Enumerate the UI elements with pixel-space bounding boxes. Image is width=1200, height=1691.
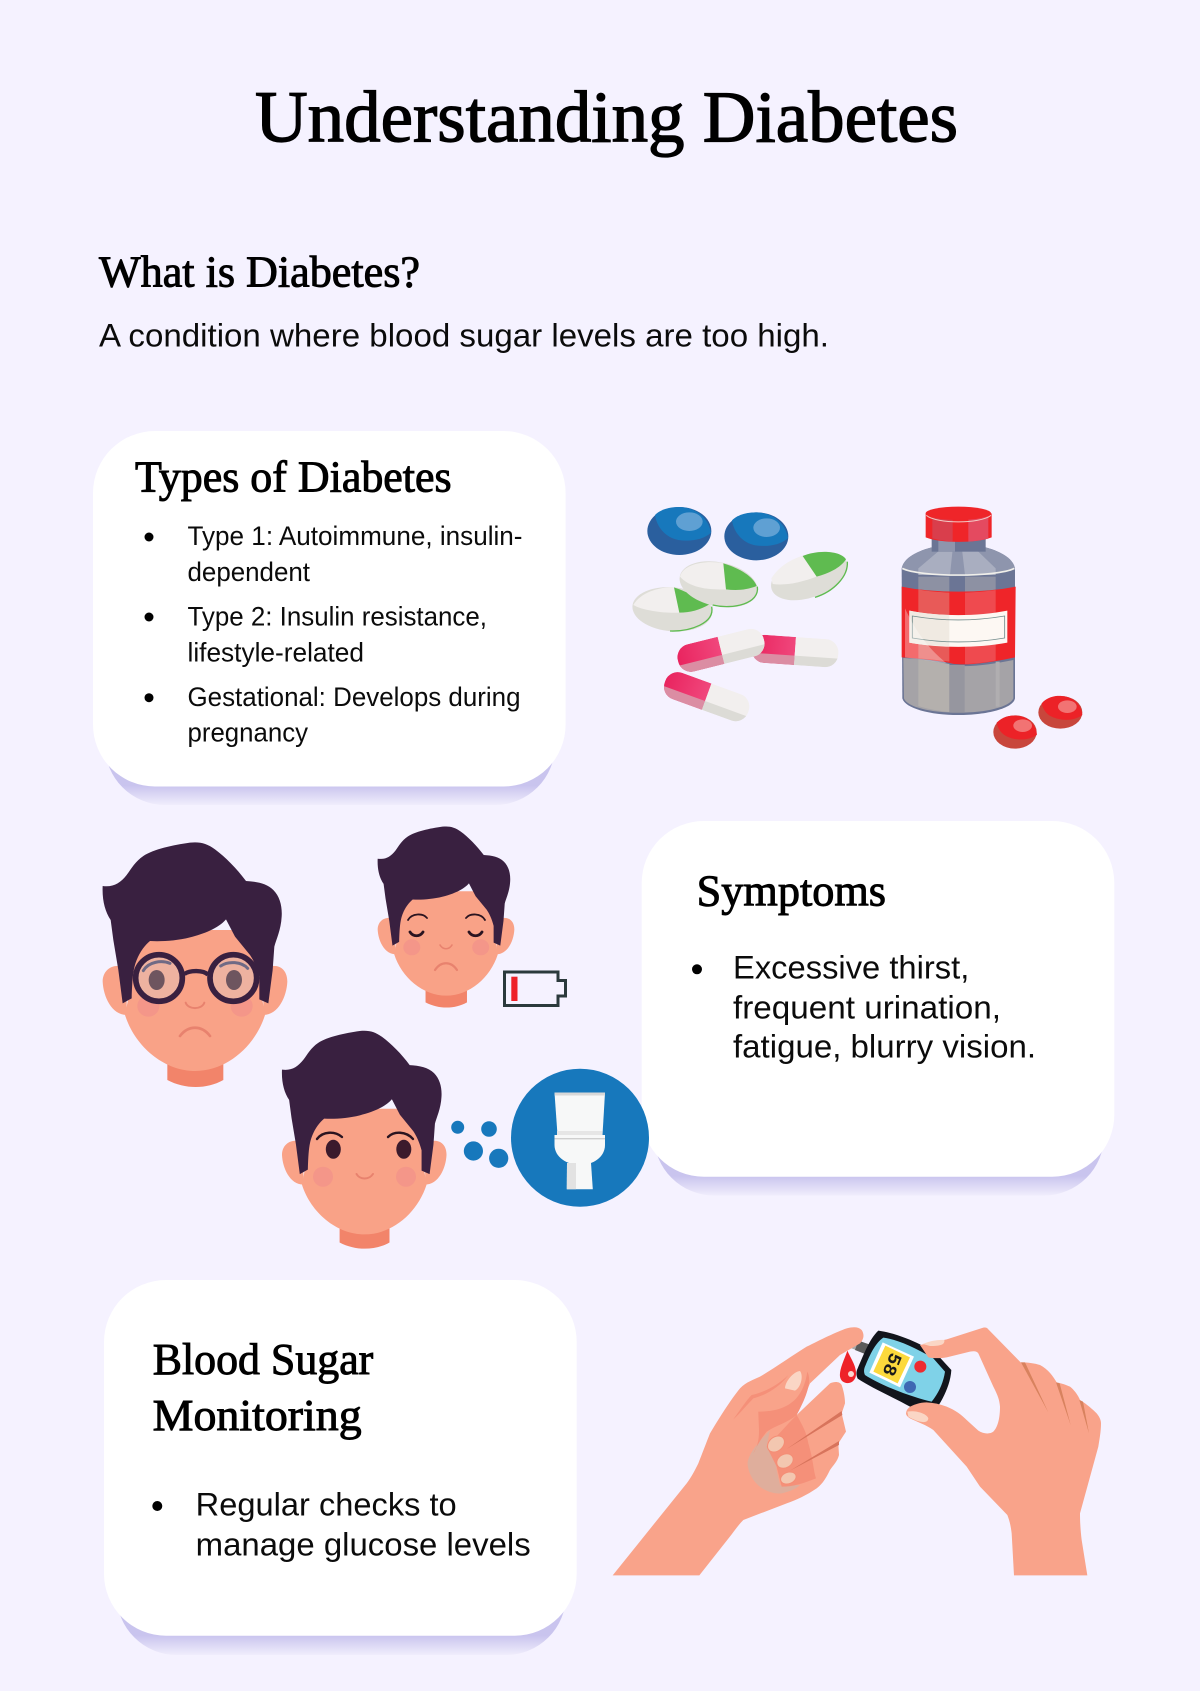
- icon: red pill left: [993, 715, 1037, 749]
- list: types: Type 2: Insulin resistance,: [188, 602, 487, 632]
- title: Understanding Diabetes: [255, 77, 958, 158]
- cheeks: [403, 939, 489, 955]
- card: [93, 431, 566, 786]
- list: symptoms: frequent urination,: [733, 989, 1001, 1025]
- list: symptoms: Excessive thirst,: [733, 949, 969, 985]
- list: monitoring: manage glucose levels: [196, 1527, 531, 1563]
- illustration: hands testing blood sugar: [613, 1327, 1101, 1575]
- icon: glucose meter: [856, 1331, 951, 1407]
- cheeks: [313, 1167, 416, 1187]
- icon: capsule top: [675, 626, 767, 675]
- list: types: Type 1: Autoimmune, insulin-: [188, 521, 522, 551]
- smile: [356, 1174, 373, 1178]
- icon: right hand: [906, 1327, 1101, 1575]
- list: types: Gestational: Develops during: [188, 682, 520, 712]
- heading: blood sugar monitoring: Blood Sugar: [153, 1335, 374, 1384]
- icon: green pill left: [631, 584, 714, 635]
- illustration: head with blurry vision: [103, 842, 287, 1087]
- card: [642, 821, 1114, 1177]
- list: types: lifestyle-related: [188, 638, 364, 668]
- closed eyes: [408, 914, 485, 936]
- heading: symptoms: Symptoms: [697, 867, 886, 916]
- card shadow: [117, 1300, 566, 1655]
- cheeks: [137, 995, 253, 1017]
- panel: types of diabetes: [93, 431, 566, 805]
- illustration: pills and bottle: [631, 507, 1082, 749]
- nose and mouth: [180, 1003, 210, 1036]
- card shadow: [654, 840, 1104, 1196]
- icon: capsule back: [751, 634, 839, 668]
- list: types: pregnancy: [188, 718, 308, 748]
- icon: green pill right: [764, 542, 854, 610]
- heading: blood sugar monitoring: [153, 1335, 374, 1440]
- heading: blood sugar monitoring: Monitoring: [153, 1391, 362, 1440]
- card: [104, 1280, 577, 1636]
- heading: types: Types of Diabetes: [135, 453, 452, 502]
- icon: blood drop: [840, 1351, 856, 1383]
- illustration: head with frequent urination: [282, 1031, 447, 1249]
- list: monitoring: [152, 1487, 531, 1563]
- eyes: [317, 1133, 413, 1159]
- icon: blue pill 1: [647, 507, 711, 555]
- icon: urine droplets: [451, 1121, 508, 1168]
- icon: blue pill 2: [724, 512, 788, 560]
- list: types: dependent: [188, 557, 310, 587]
- icon: green pill middle: [675, 555, 762, 614]
- glasses: [136, 955, 257, 1001]
- heading: what is diabetes: What is Diabetes?: [99, 248, 420, 297]
- illustration: tired head: [378, 826, 514, 1008]
- icon: toilet circle: [511, 1069, 649, 1207]
- icon: capsule bottom: [660, 668, 753, 725]
- section: what is diabetes: [99, 248, 829, 354]
- panel: blood sugar monitoring: [104, 1280, 577, 1655]
- icon: left hand: [613, 1327, 863, 1575]
- panel: symptoms: [642, 821, 1114, 1196]
- text: definition: A condition where blood sugar levels are too high.: [99, 318, 829, 354]
- icon: red pill right: [1038, 696, 1082, 729]
- list: symptoms: [692, 949, 1036, 1065]
- list: types: [144, 521, 522, 748]
- icon: low battery: [504, 972, 566, 1006]
- card shadow: [105, 450, 555, 805]
- list: symptoms: fatigue, blurry vision.: [733, 1029, 1036, 1065]
- icon: glucose meter: 58: [877, 1349, 906, 1379]
- icon: test strip: [847, 1338, 869, 1354]
- list: monitoring: Regular checks to: [196, 1487, 457, 1523]
- nose and mouth: [435, 945, 457, 970]
- icon: medicine bottle: [902, 507, 1016, 715]
